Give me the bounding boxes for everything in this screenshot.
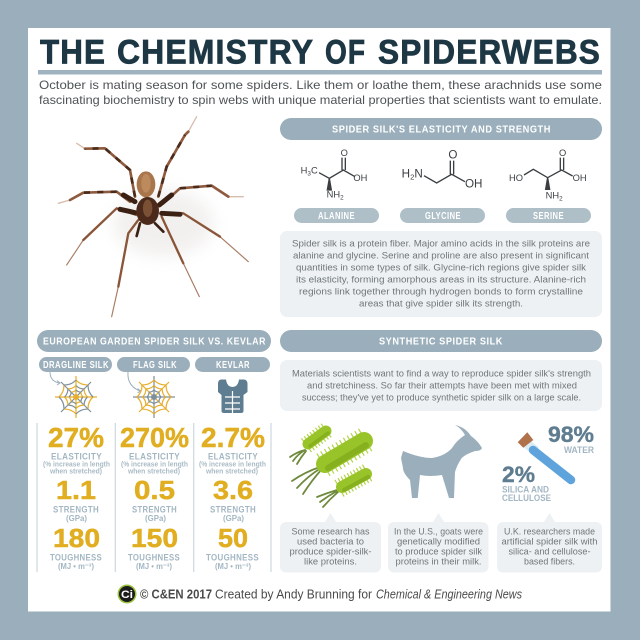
title: SPIDERWEBS [378,33,601,71]
stat: 98% water: WATER [564,445,594,456]
label: serine [506,208,591,223]
label: alanine: ALANINE [318,211,355,222]
column label: dragline silk: DRAGLINE SILK [43,360,109,371]
molecule: serine: 2 [559,195,563,202]
callout: goats [388,513,488,572]
stats column: flag silk: TOUGHNESS [128,552,180,564]
stat: 2% silica and cellulose [502,462,551,504]
molecule: glycine: OH [465,177,482,190]
stats column: dragline silk: (MJ • m⁻³) [58,562,94,571]
text panel: spider silk description: its elasticity, forming amorphous areas in its structure. Alanine-rich [296,274,586,286]
stats column: dragline silk: TOUGHNESS [50,552,102,564]
stats column: flag silk: when stretched) [127,468,180,476]
stats column: flag silk: (MJ • m⁻³) [136,562,172,571]
label: glycine: GLYCINE [425,211,461,222]
molecule: glycine: N [414,168,423,181]
footer credit: © C&EN 2017 [140,588,212,602]
intro text: October is mating season for some spiders. Like them or loathe them, these arachnids use some [39,78,602,92]
title: CHEMISTRY [117,33,314,71]
callout: bacteria [280,513,381,572]
label: serine: SERINE [533,211,564,222]
arrow: flag pointer [128,372,140,393]
stats column: dragline silk: 27% [48,422,104,453]
section header: synthetic spider silk [280,330,602,352]
stats column: flag silk [120,422,189,571]
callout: bacteria: like proteins. [304,556,357,568]
stats column: kevlar: 50 [218,523,248,553]
column label: kevlar [195,357,270,372]
icon: test tube [518,432,571,480]
stats column: kevlar: ELASTICITY [208,452,258,462]
molecule: glycine: 2 [410,173,414,182]
title: OF [325,33,366,71]
icon: flag web [133,376,175,418]
molecule: alanine [301,148,367,202]
column label: flag silk: FLAG SILK [133,360,177,371]
icon: kevlar vest [218,380,248,413]
text panel: spider silk description: Spider silk is a protein fiber. Major amino acids in the silk proteins are [292,238,590,250]
callout: silica fibers [497,513,602,572]
stats column: flag silk: 150 [131,523,178,553]
callout: goats: to produce spider silk [395,546,482,558]
callout: silica fibers: silica- and cellulose- [508,546,590,558]
callout: silica fibers: based fibers. [524,556,575,568]
stats column: dragline silk: STRENGTH [53,504,99,516]
title: THE [40,33,106,71]
intro text [39,78,602,107]
arrow: dragline pointer [50,372,60,385]
text panel: spider silk description: areas that give spider silk its strength. [359,298,523,310]
stat: 2% silica and cellulose: 2% [502,462,535,487]
stats column: dragline silk: when stretched) [49,468,102,476]
stat: 2% silica and cellulose: CELLULOSE [502,493,551,504]
text panel: spider silk description: regions link together through hydrogen bonds to form crystalline [299,286,583,298]
text panel: synthetic silk description [280,360,602,411]
molecule: alanine: OH [353,173,367,183]
callout: silica fibers: U.K. researchers made [504,526,595,538]
stats column: kevlar: STRENGTH [210,504,256,516]
stats column: kevlar: (% increase in length [199,461,266,468]
stats column: flag silk: 270% [120,422,189,453]
title [40,33,601,71]
molecule: serine: HO [509,173,523,183]
stats column: dragline silk: 1.1 [56,475,96,505]
stat: 98% water: 98% [548,422,594,447]
text panel: synthetic silk description: success; they've yet to produce synthetic spider silk on a large scale. [302,392,581,404]
molecule: serine: OH [573,173,587,183]
molecule: glycine [402,149,482,190]
molecule: serine: NH [546,190,559,200]
column label: dragline silk [39,357,112,372]
callout: goats: genetically modified [397,536,480,548]
column label: flag silk [117,357,190,372]
stats column: flag silk: 0.5 [134,475,175,505]
stats column: kevlar: 2.7% [201,422,265,453]
text panel: spider silk description [280,231,602,317]
stats column: dragline silk: (GPa) [66,514,87,523]
column dividers [37,423,271,572]
footer credit [140,588,522,602]
section header: elasticity and strength: SPIDER SILK'S ELASTICITY AND STRENGTH [332,124,551,136]
stats column: kevlar: when stretched) [205,468,258,476]
label: glycine [400,208,485,223]
molecule: alanine: 2 [340,195,344,202]
callout: bacteria: used bacteria to [297,536,364,548]
stats column: dragline silk: (% increase in length [43,461,110,468]
text panel: synthetic silk description: Materials scientists want to find a way to reproduce spider silk's strength [292,368,591,380]
molecule: alanine: NH [327,190,340,200]
molecule: alanine: 3 [307,170,311,177]
icon: dragline web [55,376,97,418]
molecule: serine [509,148,587,202]
callout: bacteria: Some research has [292,526,370,538]
intro text: fascinating biochemistry to spin webs with unique material properties that scientists want to emulate. [39,93,602,107]
callout: goats: In the U.S., goats were [394,526,483,538]
stats column: dragline silk: ELASTICITY [51,452,102,462]
footer credit: Chemical & Engineering News [376,588,522,602]
stats column: flag silk: ELASTICITY [129,452,180,462]
stats column: dragline silk [43,422,110,571]
stats column: kevlar: (GPa) [223,514,244,523]
stats column: kevlar: TOUGHNESS [206,552,259,564]
stats column: dragline silk: 180 [53,523,100,553]
stats column: kevlar: (MJ • m⁻³) [215,562,251,571]
label: alanine [294,208,379,223]
section header: spider silk vs kevlar [37,330,271,352]
spider photo illustration [58,117,248,317]
stats column: flag silk: STRENGTH [132,504,177,516]
icon: bacteria [290,430,368,507]
logo: CI: Ci [121,589,133,601]
section header: synthetic spider silk: SYNTHETIC SPIDER SILK [379,336,503,348]
stats column: flag silk: (% increase in length [121,461,188,468]
molecule: serine: O [559,148,566,158]
logo: CI [118,584,136,604]
callout: goats: proteins in their milk. [396,556,482,568]
stats column: kevlar: 3.6 [213,475,253,505]
icon: goat [401,425,482,498]
stats column: flag silk: (GPa) [145,514,166,523]
text panel: synthetic silk description: and stretchiness. So far their attempts have been met with mixed [307,380,577,392]
footer credit: Created by Andy Brunning for [215,588,372,602]
molecule: alanine: H [301,165,307,175]
section header: elasticity and strength [280,118,602,140]
molecule: alanine: O [341,148,348,158]
molecule: glycine: O [448,149,457,162]
text panel: spider silk description: alanine and glycine. Serine and proline are also present in significant [293,250,589,262]
column label: kevlar: KEVLAR [216,360,250,371]
molecule: alanine: C [311,165,318,175]
stat: 2% silica and cellulose: SILICA AND [502,484,549,496]
stats column: kevlar [199,422,266,571]
callout: bacteria: produce spider-silk- [290,546,372,558]
molecule: glycine: H [402,168,410,181]
text panel: spider silk description: quantities in some types of silk. Glycine-rich regions give spider silk [296,262,586,274]
section header: spider silk vs kevlar: EUROPEAN GARDEN SPIDER SILK VS. KEVLAR [43,336,266,348]
callout: silica fibers: artificial spider silk with [502,536,598,548]
